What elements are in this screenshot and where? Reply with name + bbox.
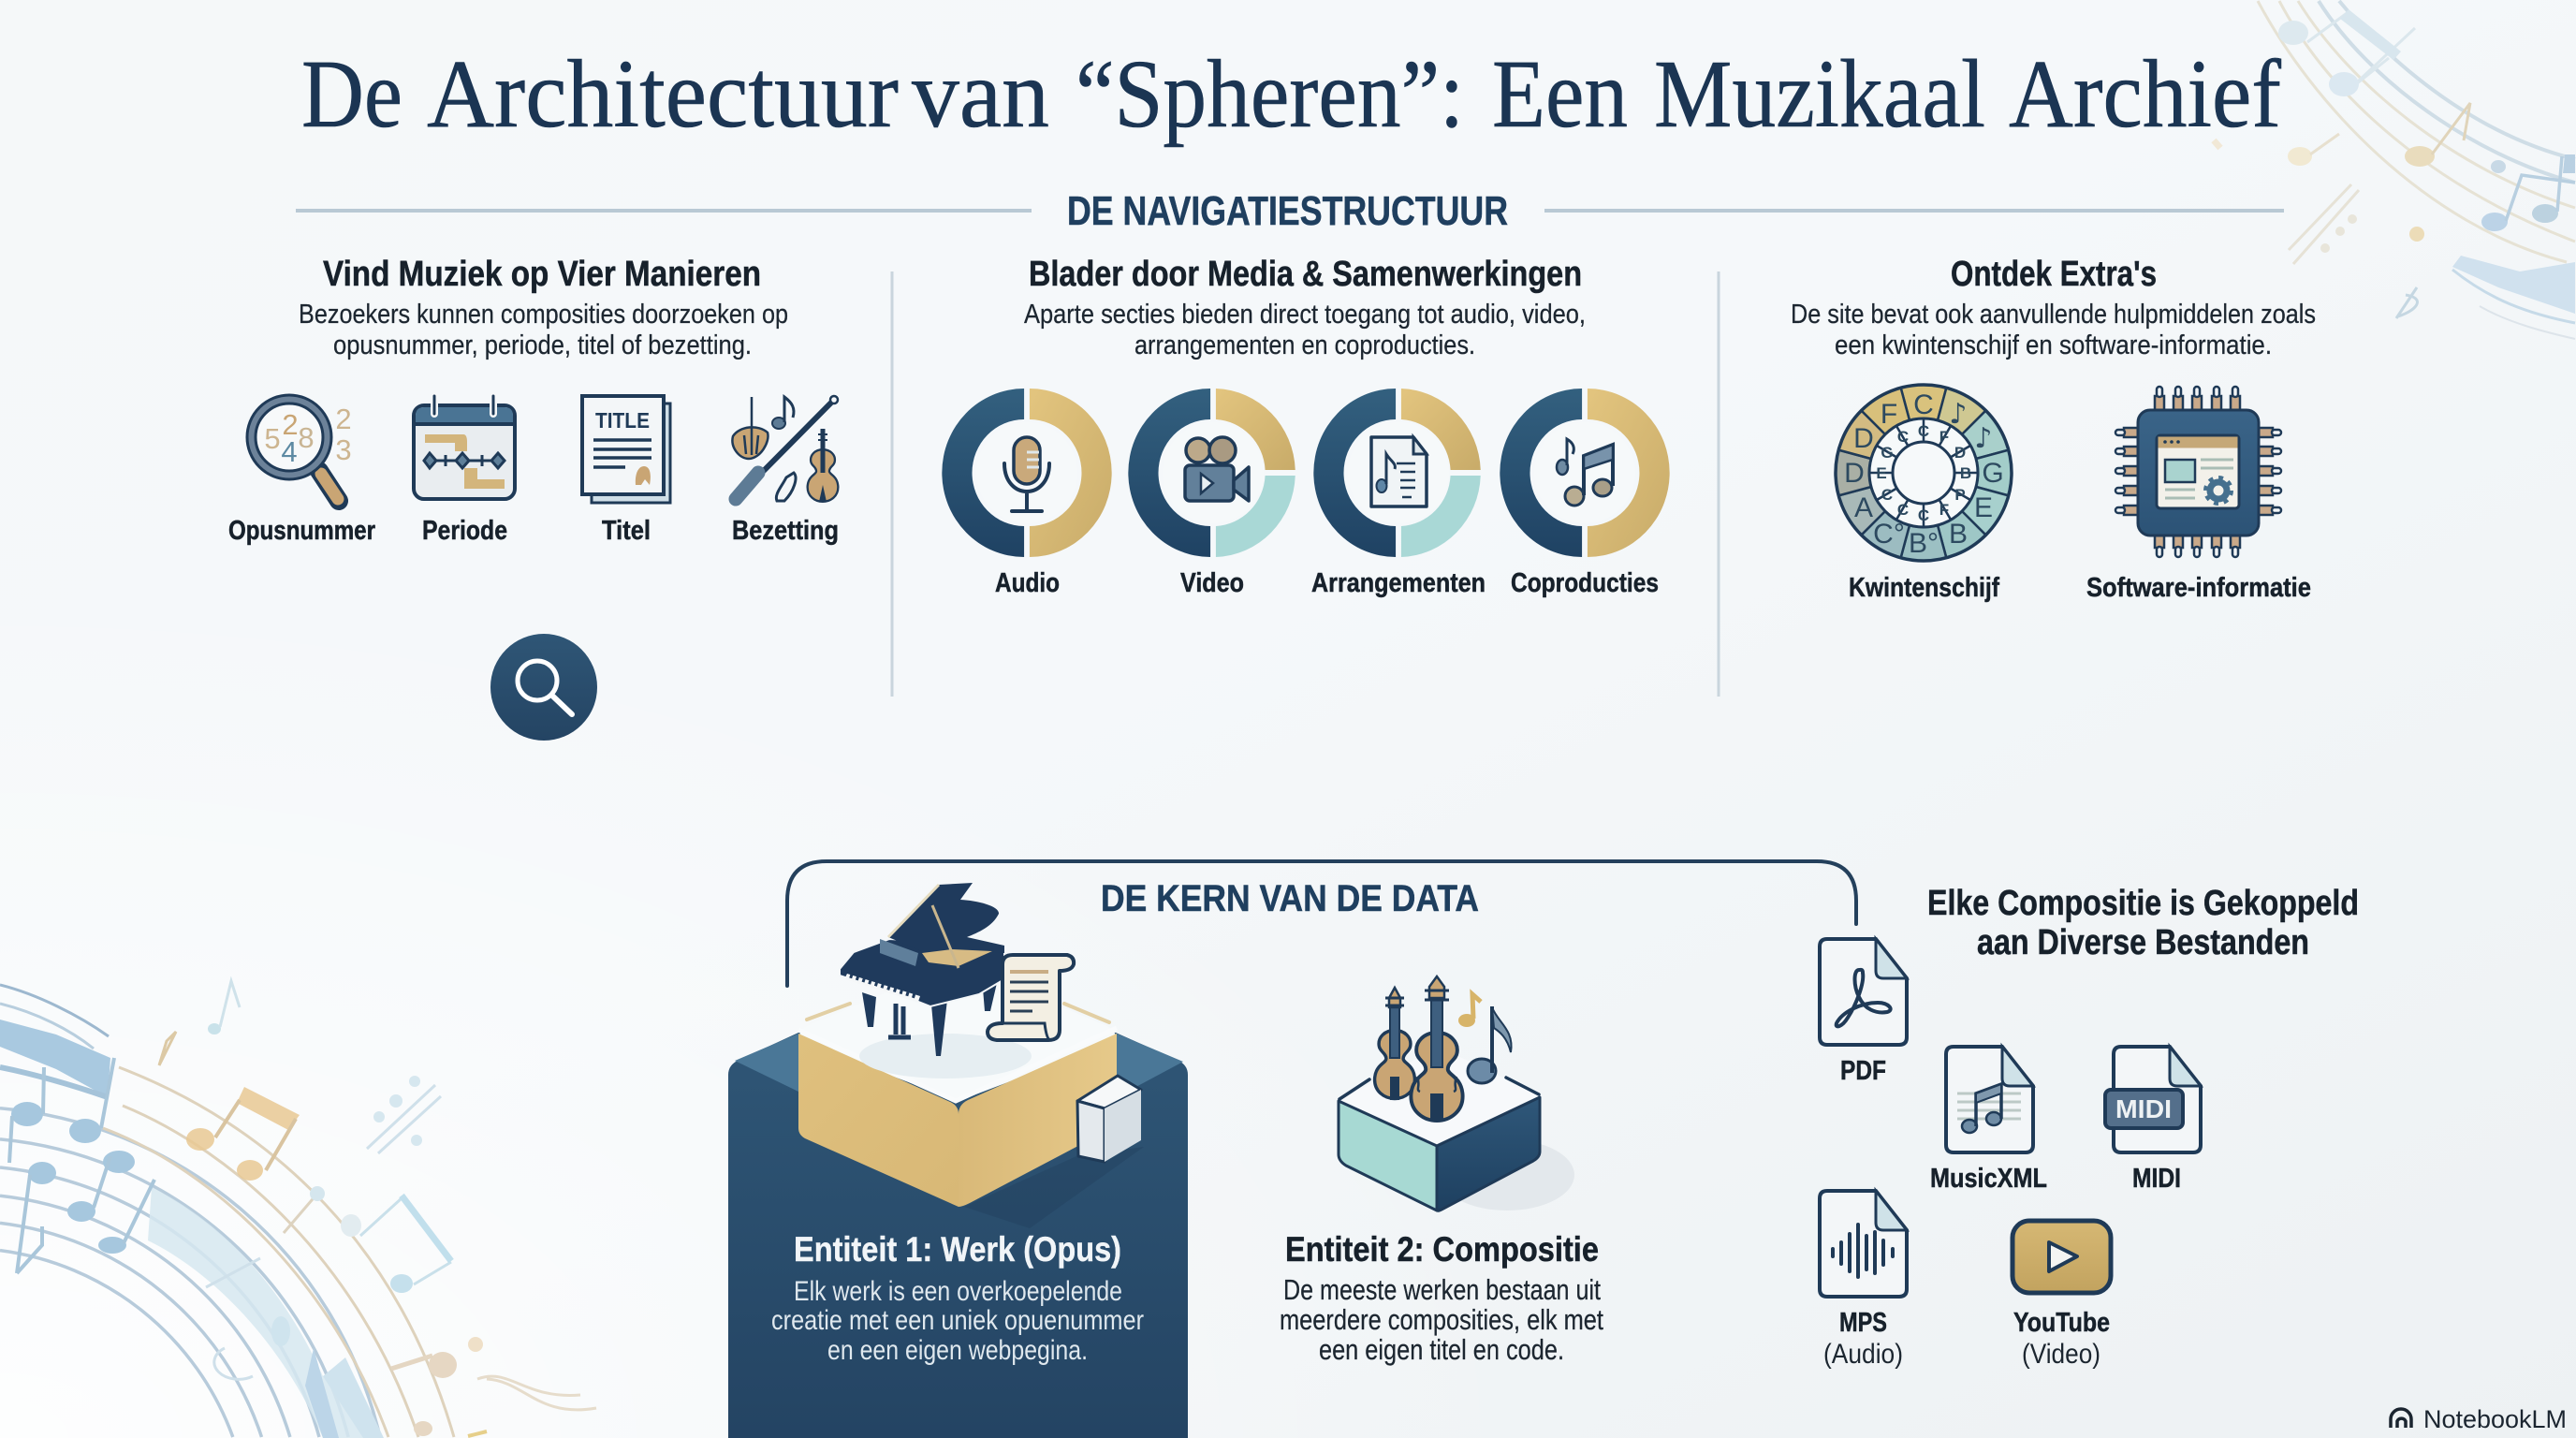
icon: circle of fifths: G <box>1881 444 1894 462</box>
donut: coproducties <box>1500 389 1670 557</box>
text block: de meeste werken <box>1280 1273 1603 1366</box>
text block: de site bevat <box>1791 300 2316 360</box>
text block: elk werk: creatie met een uniek opuenummer <box>771 1305 1144 1336</box>
panel: entiteit 1 werk <box>728 883 1188 1438</box>
icon: magnifier with numbers: 5 <box>264 422 281 455</box>
heading: elke compositie: aan Diverse Bestanden <box>1977 923 2309 962</box>
icon: magnifier with numbers <box>247 395 352 501</box>
label: kwintenschijf: Kwintenschijf <box>1849 573 1999 603</box>
icon: circle of fifths: C <box>1918 506 1929 524</box>
icon: gold box <box>798 962 1117 1207</box>
decoration: music staff bottom left <box>0 981 596 1438</box>
donut: video <box>1128 389 1295 557</box>
icon: circle of fifths: D <box>1853 423 1874 454</box>
icon: circle of fifths: C <box>1897 501 1909 519</box>
text block: bezoekers <box>299 300 788 360</box>
logo: notebooklm: NotebookLM <box>2423 1405 2567 1433</box>
heading: elke compositie <box>1927 884 2359 962</box>
panel: blader door media <box>942 255 1670 598</box>
label: youtube video <box>2013 1308 2110 1370</box>
panel background <box>728 1033 1188 1438</box>
icon: two violins and notes <box>1375 976 1512 1121</box>
icon: circle of fifths: E <box>1974 492 1993 523</box>
icon: circle of fifths: F <box>1881 399 1897 430</box>
search button <box>490 634 597 741</box>
label: software-informatie: Software-informatie <box>2086 573 2311 603</box>
heading: vind muziek: Vind Muziek op Vier Manieren <box>323 255 761 294</box>
panel: entiteit 2 compositie <box>1280 976 1603 1366</box>
donut: arrangementen <box>1313 389 1481 557</box>
label: video: Video <box>1180 568 1244 598</box>
heading: de kern van de data: DE KERN VAN DE DATA <box>1101 878 1479 919</box>
icon: circle of fifths: C <box>1913 389 1934 420</box>
text block: aparte secties <box>1024 300 1586 360</box>
icon: magnifier with numbers: 4 <box>281 435 298 468</box>
icon: circle of fifths: D <box>1954 444 1966 462</box>
icon: youtube <box>2012 1221 2111 1293</box>
label: coproducties: Coproducties <box>1511 568 1659 598</box>
title <box>301 40 2281 148</box>
label: midi: MIDI <box>2132 1164 2181 1194</box>
label: youtube video: (Video) <box>2022 1339 2100 1370</box>
title: Een <box>1492 40 1628 148</box>
panel: bestanden <box>1820 884 2359 1370</box>
heading: elke compositie: Elke Compositie is Gekoppeld <box>1927 884 2359 923</box>
icon: teal and navy box <box>1339 1047 1574 1211</box>
icon: circle of fifths: C <box>1881 486 1893 504</box>
icon: midi file: MIDI <box>2115 1094 2172 1123</box>
text block: aparte secties: arrangementen en coproducties. <box>1134 330 1475 360</box>
text block: elk werk: en een eigen webpegina. <box>827 1335 1088 1366</box>
icon: small cube <box>1077 1076 1141 1162</box>
label: audio: Audio <box>995 568 1060 598</box>
text block: bezoekers: opusnummer, periode, titel of bezetting. <box>333 330 752 360</box>
text block: de meeste werken: meerdere composities, elk met <box>1280 1303 1603 1336</box>
label: bezetting: Bezetting <box>732 516 839 546</box>
icon: scroll <box>988 955 1074 1040</box>
heading: ontdek extra's: Ontdek Extra's <box>1951 255 2157 294</box>
icon: pdf file <box>1820 939 1907 1045</box>
label: periode: Periode <box>422 516 507 546</box>
icon: circle of fifths: ♪ <box>1949 398 1968 431</box>
text block: de meeste werken: De meeste werken bestaan uit <box>1283 1273 1601 1306</box>
icon: grand piano <box>840 883 1004 1056</box>
icon: circle of fifths: P <box>1954 486 1966 504</box>
icon: circle of fifths: G <box>1982 458 2004 489</box>
title: Muzikaal <box>1654 40 1985 148</box>
decoration: music staff top right <box>2214 1 2575 339</box>
label: musicxml: MusicXML <box>1930 1164 2047 1194</box>
icon: circle of fifths: F <box>1939 501 1949 519</box>
icon: circle of fifths: E <box>1876 464 1887 482</box>
label: mps audio <box>1823 1308 1903 1370</box>
icon: circle of fifths: B <box>1949 519 1968 550</box>
label: pdf: PDF <box>1840 1056 1886 1086</box>
icon: instruments <box>732 396 838 502</box>
icon: circle of fifths: F <box>1939 428 1949 446</box>
icon: magnifier with numbers: 8 <box>298 421 315 454</box>
title: van <box>912 40 1049 148</box>
icon: magnifier with numbers: 3 <box>335 433 352 466</box>
icon: circle of fifths <box>1836 385 2012 561</box>
icon: title document <box>582 396 670 503</box>
title: De <box>301 40 402 148</box>
title: Architectuur <box>427 40 899 148</box>
text block: bezoekers: Bezoekers kunnen composities doorzoeken op <box>299 300 788 330</box>
panel: vind muziek <box>228 255 839 546</box>
icon: software chip <box>2115 387 2281 557</box>
label: mps audio: (Audio) <box>1823 1339 1903 1370</box>
text block: de site bevat: een kwintenschijf en software-informatie. <box>1835 330 2272 360</box>
section heading: de navigatiestructuur: DE NAVIGATIESTRUCTUUR <box>1067 188 1508 234</box>
label: youtube video: YouTube <box>2013 1308 2110 1338</box>
icon: musicxml file <box>1946 1047 2033 1152</box>
icon: magnifier with numbers: 2 <box>282 408 299 441</box>
text block: elk werk <box>771 1276 1144 1366</box>
label: titel: Titel <box>602 516 651 546</box>
icon: title document: TITLE <box>595 408 650 433</box>
text block: elk werk: Elk werk is een overkoepelende <box>794 1276 1122 1307</box>
label: opusnummer: Opusnummer <box>228 516 375 546</box>
text block: aparte secties: Aparte secties bieden direct toegang tot audio, video, <box>1024 300 1586 330</box>
title: “Spheren”: <box>1076 40 1464 148</box>
icon: audio file <box>1820 1191 1907 1297</box>
title: Archief <box>2009 40 2281 148</box>
icon: circle of fifths: C <box>1897 428 1909 446</box>
icon: circle of fifths: B° <box>1909 528 1939 559</box>
heading: blader: Blader door Media & Samenwerkingen <box>1029 255 1582 294</box>
icon: circle of fifths: C <box>1918 422 1929 440</box>
text block: de site bevat: De site bevat ook aanvullende hulpmiddelen zoals <box>1791 300 2316 330</box>
heading: entiteit 2: Entiteit 2: Compositie <box>1285 1230 1599 1269</box>
label: mps audio: MPS <box>1839 1308 1887 1338</box>
icon: circle of fifths: C° <box>1873 519 1905 550</box>
label: arrangementen: Arrangementen <box>1311 568 1486 598</box>
icon: calendar <box>414 396 515 499</box>
icon: circle of fifths: ♪ <box>1974 422 1993 455</box>
icon: midi file <box>2105 1047 2201 1152</box>
panel: ontdek extra's <box>1791 255 2316 603</box>
icon: circle of fifths: B <box>1960 464 1971 482</box>
heading: entiteit 1: Entiteit 1: Werk (Opus) <box>794 1230 1121 1269</box>
donut: audio <box>942 389 1112 557</box>
text block: de meeste werken: een eigen titel en code. <box>1319 1333 1564 1366</box>
icon: circle of fifths: D <box>1844 458 1865 489</box>
bracket: de kern van de data <box>787 861 1856 986</box>
icon: circle of fifths: A <box>1854 492 1873 523</box>
icon: magnifier with numbers: 2 <box>335 403 352 435</box>
